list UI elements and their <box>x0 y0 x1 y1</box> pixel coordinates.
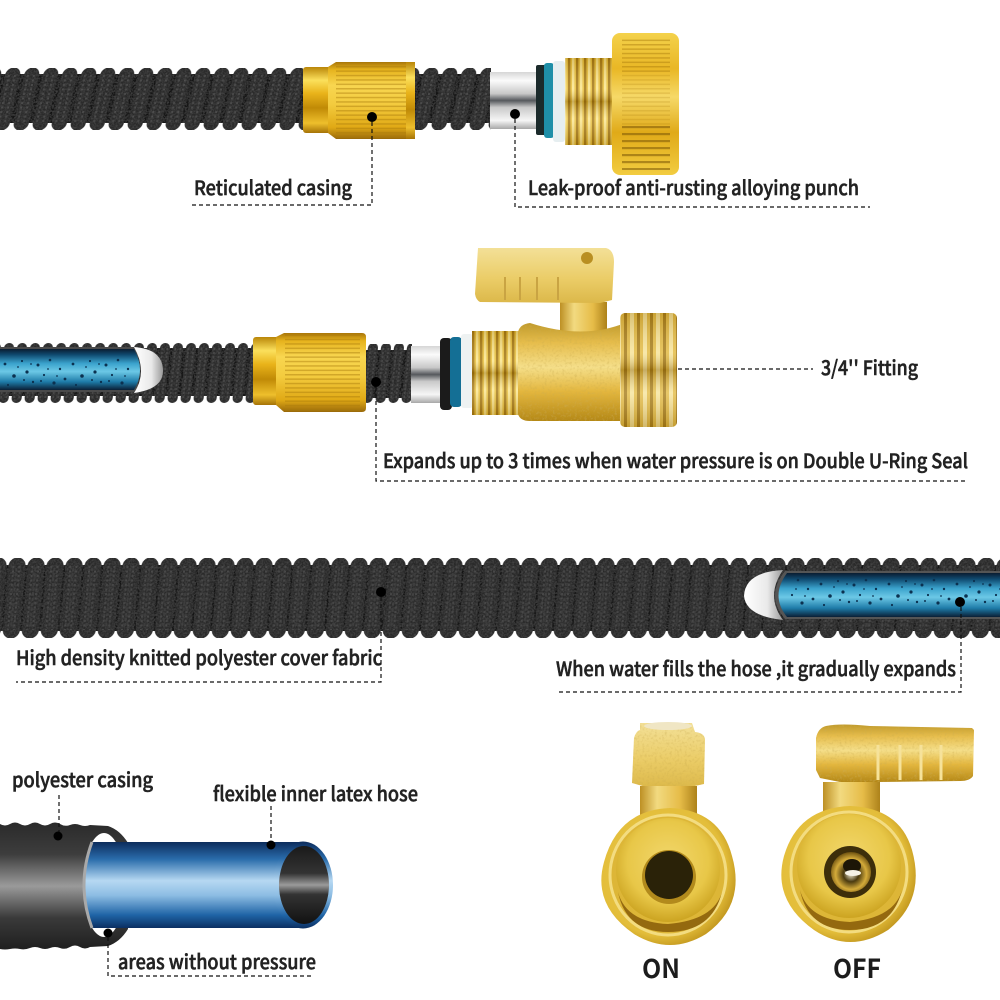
handle end <box>632 722 705 788</box>
gold coupling <box>303 62 415 139</box>
seal rings <box>440 334 473 410</box>
left thread <box>472 331 519 415</box>
opening gap <box>83 833 125 937</box>
callout: reticulated casing <box>192 112 377 205</box>
panel: valve ON <box>601 722 736 945</box>
threaded neck <box>565 58 613 145</box>
hose body <box>0 558 1000 638</box>
callout: fitting size: 3/4'' Fitting <box>821 352 918 381</box>
callout: expansion and seal <box>371 377 968 481</box>
valve body <box>518 323 625 421</box>
seal rings <box>536 61 565 142</box>
callout: inner latex hose <box>213 778 418 850</box>
white cut edge <box>744 570 783 620</box>
bore hole <box>642 850 696 904</box>
label: ON: ON <box>642 949 680 986</box>
callout: polyester casing <box>12 764 153 840</box>
water-filled inner tube cutaway <box>0 347 163 393</box>
knitted hose sections <box>0 342 412 404</box>
round body <box>781 806 916 942</box>
valve handle <box>475 248 614 303</box>
callout: leak-proof punch: Leak-proof anti-rusting alloying punch <box>528 172 859 201</box>
panel: valve OFF <box>781 724 974 942</box>
right thread <box>620 313 677 427</box>
stem <box>823 782 880 816</box>
panel: top hose with nut connector <box>0 33 679 175</box>
callout: leak-proof punch <box>510 109 870 207</box>
callout: knitted cover: High density knitted polyester cover fabric <box>16 642 382 671</box>
callout: areas without pressure <box>104 928 316 976</box>
callout: knitted cover <box>16 587 386 682</box>
callout: inner latex hose: flexible inner latex hose <box>213 778 418 807</box>
panel: expanded knitted hose <box>0 558 1000 638</box>
inner blue tube <box>84 842 333 928</box>
gold coupling <box>253 333 366 412</box>
valve stem <box>560 302 607 334</box>
label: OFF: OFF <box>833 949 881 986</box>
knurled nut <box>612 33 679 175</box>
stem <box>640 786 697 822</box>
callout: water expansion: When water fills the hose ,it gradually expands <box>556 653 956 682</box>
knitted hose sections <box>0 68 491 130</box>
callout: water expansion <box>556 597 965 692</box>
round body <box>601 808 736 945</box>
silver punch sleeve <box>490 72 538 129</box>
inner tube with water <box>775 571 1000 619</box>
lever handle <box>816 724 974 782</box>
silver punch sleeve <box>411 346 443 403</box>
panel: hose cross-section <box>0 822 333 950</box>
callout: polyester casing: polyester casing <box>12 764 153 793</box>
callout: reticulated casing: Reticulated casing <box>194 172 352 201</box>
outer polyester casing <box>0 822 128 950</box>
panel: middle hose with ball valve <box>0 248 677 427</box>
callout: areas without pressure: areas without pressure <box>118 946 316 975</box>
closed ball <box>824 846 876 898</box>
